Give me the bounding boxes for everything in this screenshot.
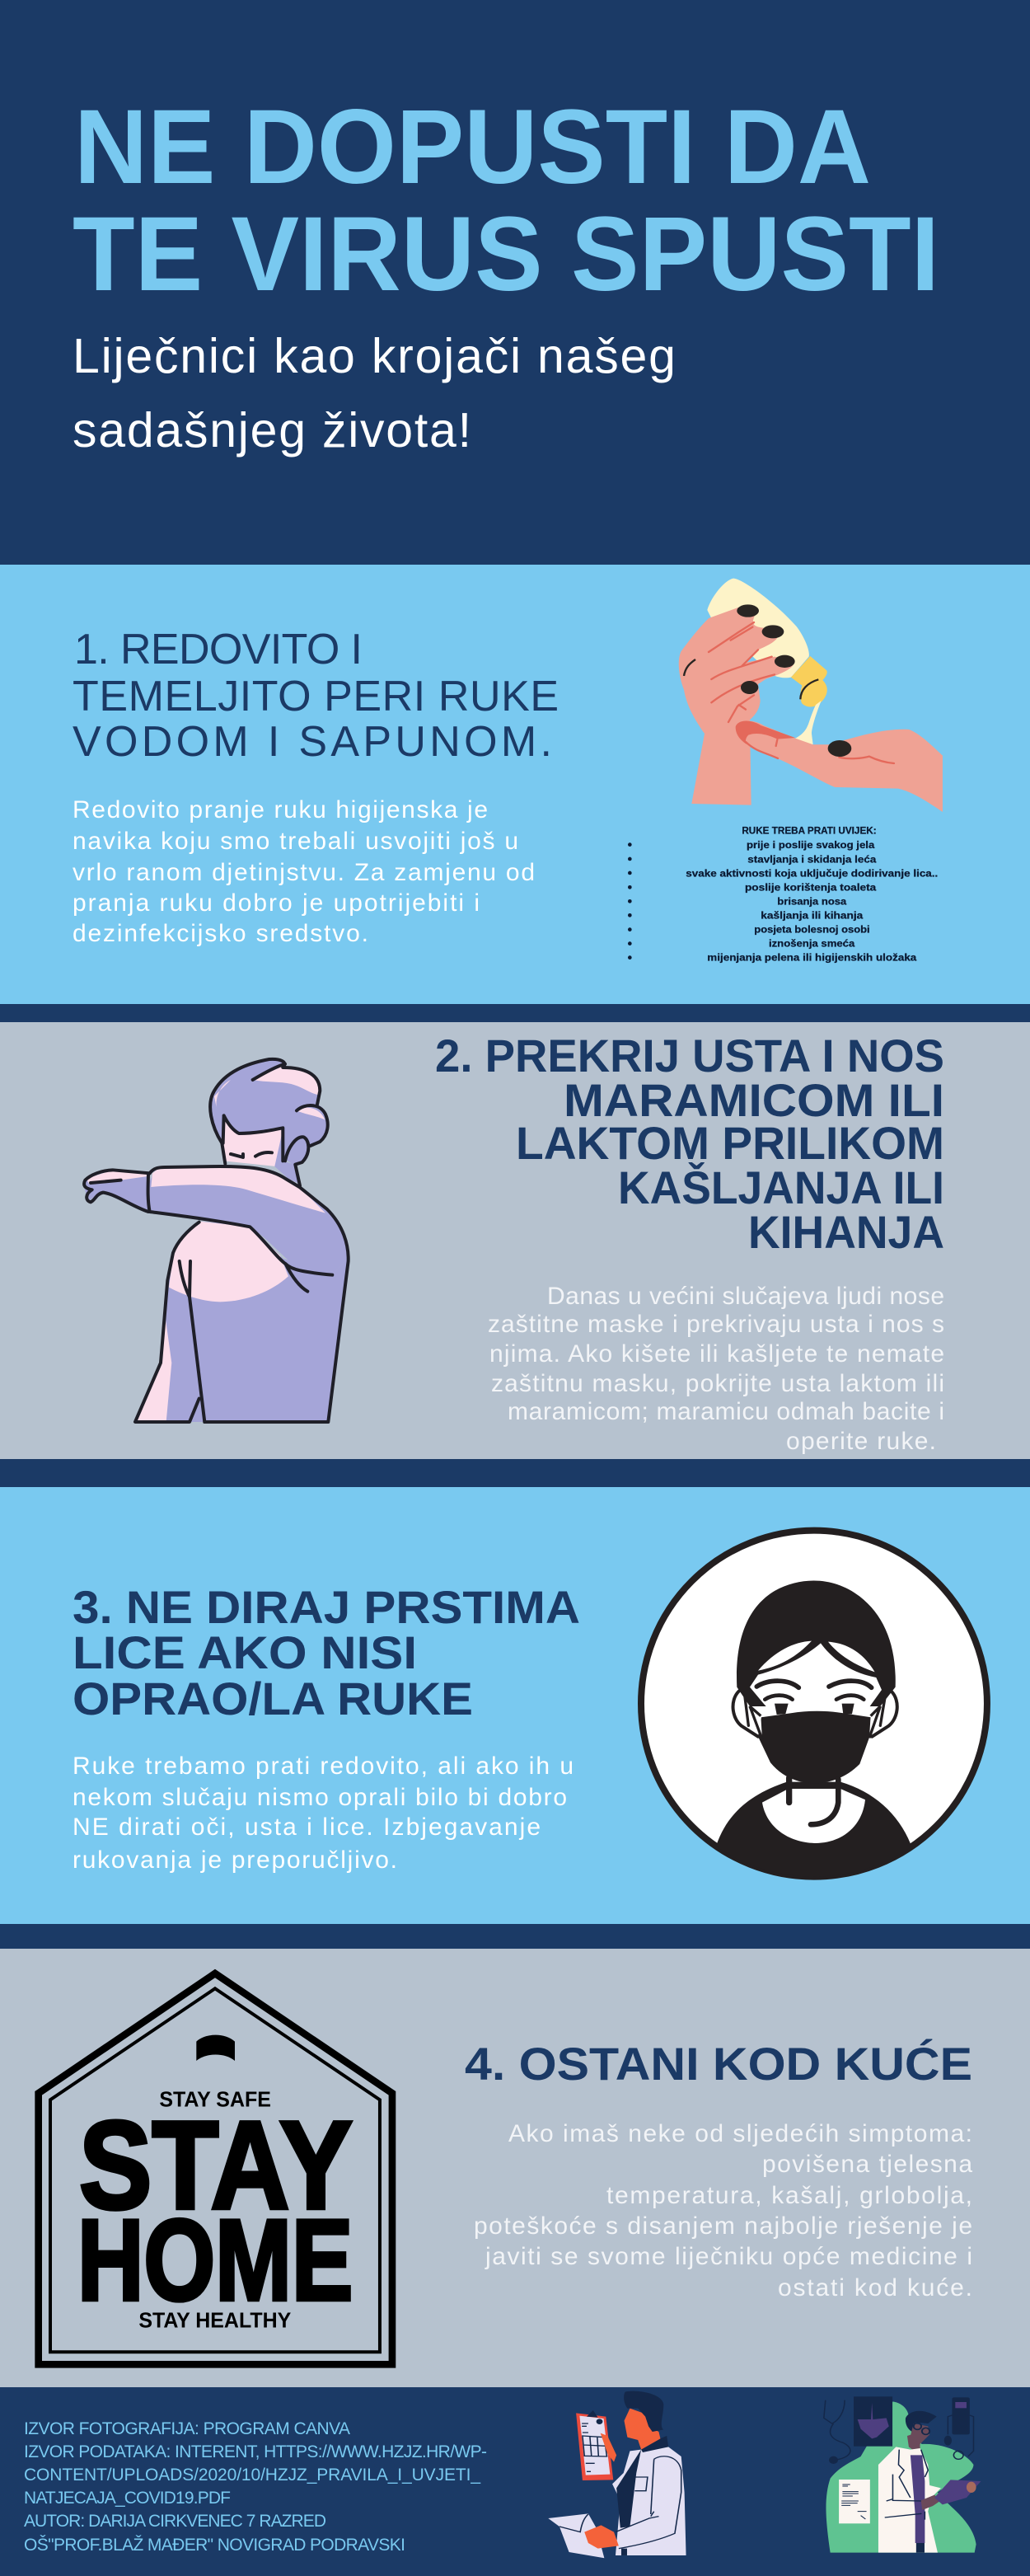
icon: hands with soap bottle (679, 579, 943, 812)
heading: step 4: 4. OSTANI KOD KUĆE (465, 2038, 972, 2090)
title (73, 88, 939, 313)
text block: sources and author: CONTENT/UPLOADS/2020/10/HZJZ_PRAVILA_I_UVJETI_ (24, 2466, 480, 2485)
text block: step 1 body: pranja ruku dobro je upotrijebiti i (73, 889, 480, 917)
text block: sources and author: OŠ"PROF.BLAŽ MAĐER" NOVIGRAD PODRAVSKI (24, 2536, 405, 2555)
panel: step 4 stay home (0, 1949, 1030, 2387)
heading: step 1: 1. REDOVITO I (74, 626, 363, 673)
panel: header (0, 0, 1030, 565)
heading: step 3 (73, 1581, 580, 1724)
text block: step 2 body: operite ruke. (786, 1428, 936, 1455)
icon: doctor with x-ray and stethoscope (824, 2396, 981, 2553)
text block: step 2 body: njima. Ako kišete ili kašljete te nemate (489, 1340, 944, 1368)
text block: step 3 body: rukovanja je preporučljivo. (73, 1846, 397, 1874)
heading: step 2: LAKTOM PRILIKOM (516, 1117, 944, 1169)
heading: step 2: MARAMICOM ILI (564, 1074, 944, 1126)
list: when to wash hands: brisanja nosa (777, 896, 847, 908)
list: when to wash hands: posjeta bolesnoj osobi (754, 924, 870, 936)
panel: footer (0, 2387, 1030, 2576)
text block: step 4 body: povišena tjelesna (762, 2151, 972, 2178)
text block: step 3 body: nekom slučaju nismo oprali bilo bi dobro (73, 1784, 567, 1811)
icon: stay home house badge: HOME (77, 2195, 353, 2325)
panel: step 1 wash hands (0, 565, 1030, 1004)
list: when to wash hands: poslije korištenja toaleta (745, 882, 877, 894)
icon: stay home house badge (39, 1973, 392, 2364)
subtitle: Liječnici kao krojači našeg (73, 329, 676, 383)
text block: step 1 body: dezinfekcijsko sredstvo. (73, 920, 368, 947)
text block: step 4 body: javiti se svome liječniku opće medicine i (485, 2243, 972, 2270)
text block: step 1 body: navika koju smo trebali usvojiti još u (73, 828, 518, 855)
heading: step 1 (73, 626, 559, 766)
subtitle (73, 329, 676, 457)
text block: step 4 body: poteškoće s disanjem najbolje rješenje je (474, 2212, 972, 2240)
icon: stay home house badge: STAY HEALTHY (138, 2307, 291, 2332)
panel: step 2 cover mouth (0, 1022, 1030, 1459)
title: NE DOPUSTI DA (74, 88, 871, 206)
panel: step 3 do not touch face (0, 1487, 1030, 1924)
list: when to wash hands: kašljanja ili kihanja (761, 910, 864, 922)
text block: step 1 body (73, 796, 535, 947)
list: when to wash hands (628, 825, 938, 964)
list: when to wash hands: RUKE TREBA PRATI UVIJEK: (742, 825, 877, 837)
text block: sources and author (24, 2419, 487, 2555)
heading: step 1: TEMELJITO PERI RUKE (73, 673, 559, 720)
list: when to wash hands: prije i poslije svakog jela (747, 839, 875, 851)
icon: stay home house badge: STAY SAFE (159, 2087, 271, 2112)
text block: step 3 body: NE dirati oči, usta i lice. Izbjegavanje (73, 1814, 541, 1841)
text block: step 2 body: maramicom; maramicu odmah bacite i (508, 1398, 944, 1425)
text block: sources and author: IZVOR PODATAKA: INTERENT, HTTPS://WWW.HZJZ.HR/WP- (24, 2442, 487, 2461)
text block: step 2 body: Danas u većini slučajeva ljudi nose (547, 1283, 944, 1310)
heading: step 1: VODOM I SAPUNOM. (73, 718, 552, 766)
text block: step 2 body: zaštitne maske i prekrivaju usta i nos s (488, 1311, 944, 1338)
heading: step 3: LICE AKO NISI (73, 1626, 417, 1678)
list: when to wash hands: stavljanja i skidanja leća (747, 853, 877, 865)
icon: person wearing face mask (641, 1531, 987, 1885)
text block: step 2 body (488, 1283, 944, 1455)
heading: step 2: 2. PREKRIJ USTA I NOS (435, 1030, 944, 1082)
text block: sources and author: NATJECAJA_COVID19.PDF (24, 2489, 231, 2508)
heading: step 3: 3. NE DIRAJ PRSTIMA (73, 1581, 580, 1633)
title: TE VIRUS SPUSTI (73, 195, 939, 313)
text block: step 3 body: Ruke trebamo prati redovito, ali ako ih u (73, 1753, 574, 1780)
text block: step 1 body: Redovito pranje ruku higijenska je (73, 796, 488, 823)
icon: doctor with clipboard (548, 2391, 686, 2558)
text block: step 1 body: vrlo ranom djetinjstvu. Za zamjenu od (73, 859, 535, 886)
heading: step 3: OPRAO/LA RUKE (73, 1673, 473, 1724)
text block: step 4 body: Ako imaš neke od sljedećih simptoma: (508, 2120, 972, 2147)
list: when to wash hands: mijenjanja pelena ili higijenskih uložaka (707, 952, 917, 964)
heading: step 2 (435, 1030, 944, 1258)
heading: step 2: KIHANJA (748, 1206, 944, 1258)
icon: stay home house badge: STAY (79, 2095, 353, 2236)
text block: step 4 body (474, 2120, 972, 2302)
icon: person sneezing into elbow (84, 1059, 349, 1422)
list: when to wash hands: svake aktivnosti koja uključuje dodirivanje lica.. (686, 868, 938, 880)
text block: step 3 body (73, 1753, 574, 1874)
list: when to wash hands: iznošenja smeća (769, 938, 855, 950)
subtitle: sadašnjeg života! (73, 403, 471, 457)
text block: step 4 body: temperatura, kašalj, grlobolja, (606, 2182, 972, 2209)
heading: step 2: KAŠLJANJA ILI (618, 1161, 944, 1213)
text block: step 4 body: ostati kod kuće. (778, 2274, 972, 2302)
text block: sources and author: IZVOR FOTOGRAFIJA: PROGRAM CANVA (24, 2419, 350, 2438)
text block: sources and author: AUTOR: DARIJA CIRKVENEC 7 RAZRED (24, 2512, 326, 2531)
text block: step 2 body: zaštitnu masku, pokrijte usta laktom ili (491, 1370, 944, 1397)
